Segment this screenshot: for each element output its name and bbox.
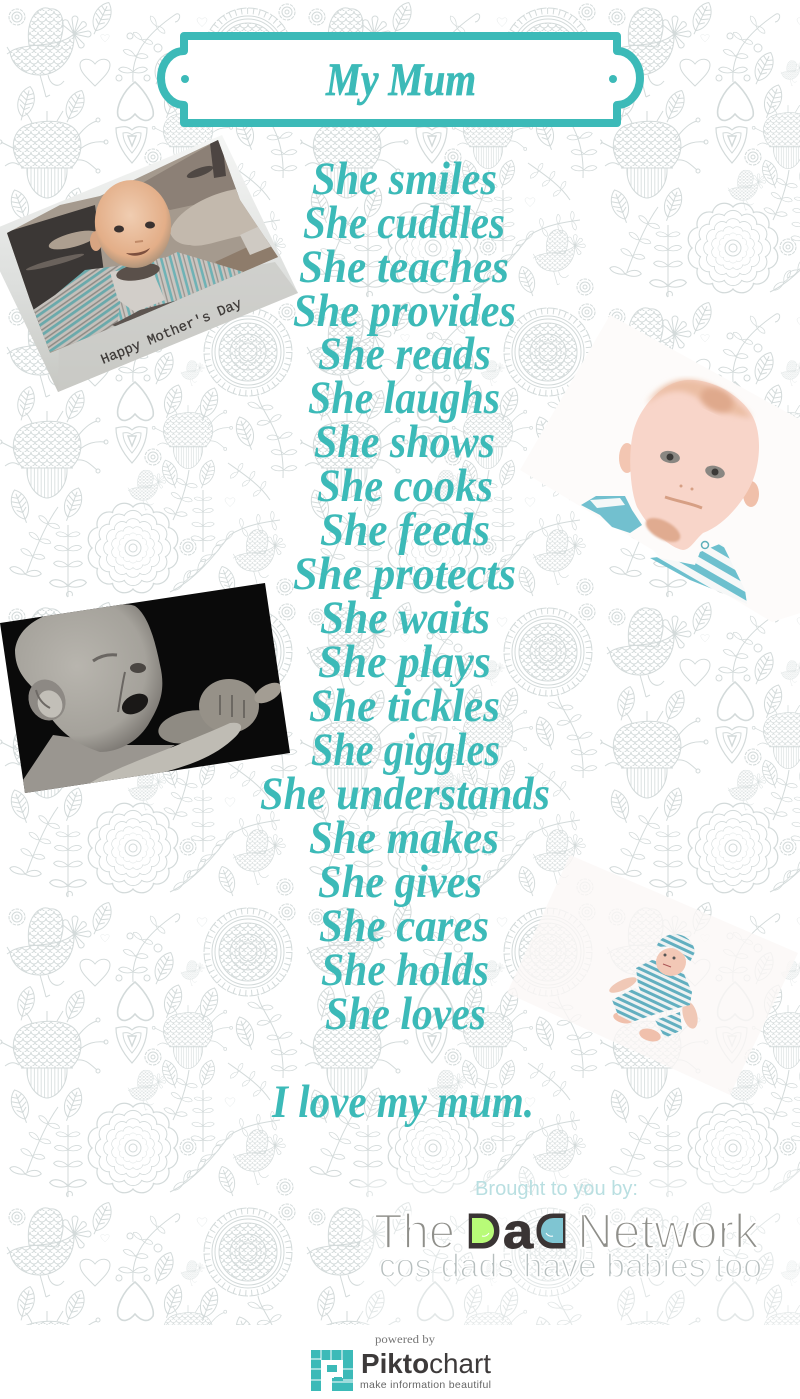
poem: repeated lines: She cares (319, 900, 489, 952)
poem: repeated lines: She loves (325, 988, 486, 1040)
title banner (161, 36, 640, 123)
poem: repeated lines: She makes (309, 812, 499, 864)
poem: repeated lines: She laughs (308, 372, 500, 424)
poem: repeated lines: She tickles (309, 680, 500, 732)
poem: repeated lines: I love my mum. (271, 1076, 534, 1128)
pale wash behind logo (360, 1170, 800, 1325)
poem: repeated lines: She shows (314, 416, 495, 468)
logo: The Dad Network (374, 1205, 762, 1284)
eye, nose, mouth (93, 655, 117, 661)
icon: Piktochart mark (311, 1350, 353, 1391)
striped top (581, 496, 747, 604)
poem: repeated lines: She plays (318, 636, 491, 688)
credit: brought to you by: Brought to you by: (475, 1178, 638, 1200)
photo: smiling baby close-up (520, 315, 800, 622)
tagline: make information beautiful (360, 1379, 491, 1391)
poem: repeated lines: She feeds (320, 504, 490, 556)
striped arm right (117, 252, 247, 327)
poem: repeated lines: She cooks (317, 460, 493, 512)
poem: repeated lines: She holds (321, 944, 489, 996)
polaroid caption: Happy Mother's Day (99, 296, 245, 369)
poem: repeated lines: She cuddles (303, 197, 505, 249)
poem: repeated lines: She smiles (312, 153, 497, 205)
striped arm left (33, 265, 130, 352)
Piktochart wordmark: Piktochart (361, 1348, 491, 1379)
poem: repeated lines: She understands (260, 768, 550, 820)
poem: repeated lines: She teaches (299, 241, 509, 293)
logo tagline: cos dads have babies too (379, 1247, 762, 1284)
adult hand (90, 723, 241, 784)
logo mark: DaD: a (503, 1205, 534, 1259)
title text: My Mum (325, 54, 476, 106)
poem: repeated lines (260, 153, 550, 1128)
logo word: The: The (374, 1205, 455, 1259)
poem: repeated lines: She gives (318, 856, 482, 908)
photo: baby on bed polaroid (0, 130, 300, 392)
chest and shoulder (23, 735, 175, 795)
logo mark: DaD: D (466, 1205, 501, 1259)
poem: repeated lines: She protects (293, 548, 516, 600)
logo word: Network: Network (577, 1205, 759, 1259)
ear (28, 680, 66, 720)
head (15, 604, 162, 752)
baby head (89, 175, 177, 273)
poem: repeated lines: She reads (318, 328, 491, 380)
photo: crying newborn (0, 583, 290, 795)
poem: repeated lines: She waits (320, 592, 490, 644)
poem: repeated lines: She provides (293, 285, 516, 337)
logo mark: DaD (466, 1205, 568, 1259)
logo mark: DaD: D (535, 1205, 568, 1259)
poem: repeated lines: She giggles (311, 724, 500, 776)
photo: sitting baby in stripes (507, 855, 798, 1095)
sitting baby (607, 934, 700, 1044)
powered by text: powered by (375, 1334, 435, 1346)
baby face (619, 380, 759, 550)
baby fist and arm (158, 710, 215, 744)
footer: powered by Piktochart (311, 1334, 491, 1391)
